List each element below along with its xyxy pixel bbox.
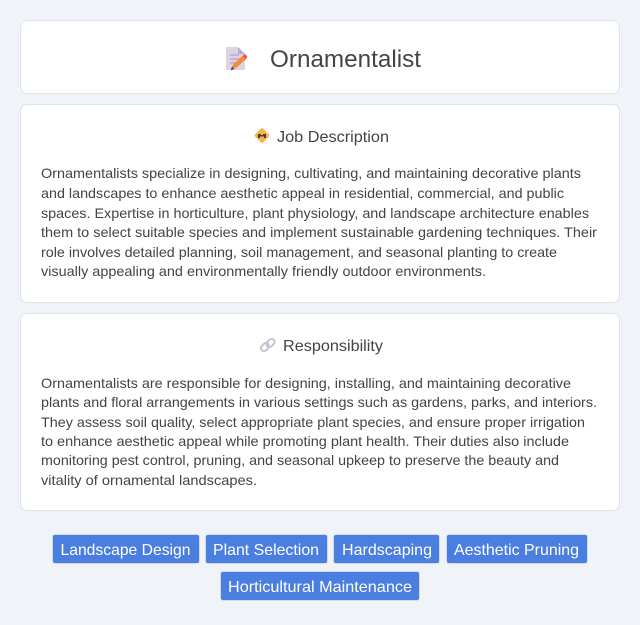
tag: Aesthetic Pruning background: [446, 534, 588, 564]
tag labels: Horticultural Maintenance: [228, 579, 412, 596]
text: responsibility body: Ornamentalists are responsible for designing, installing, and maintaining decorative: [41, 375, 571, 391]
text: responsibility body: They assess soil quality, select appropriate plant species, and ensure proper irrigation: [41, 414, 585, 430]
text: responsibility body: to enhance aesthetic appeal while promoting plant health. Their duties also include: [41, 433, 569, 449]
tag labels: [60, 542, 579, 596]
text: responsibility body: vitality of ornamental landscapes.: [41, 472, 257, 488]
text: job description body: [41, 165, 597, 279]
text: job description body: Ornamentalists specialize in designing, cultivating, and maintaining decorative plants: [41, 165, 581, 181]
title: Ornamentalist: [270, 46, 421, 73]
tag labels: Landscape Design: [60, 542, 190, 559]
icon: document with pencil: [226, 47, 248, 70]
tag: Hardscaping background: [333, 534, 440, 564]
tag labels: Plant Selection: [213, 542, 319, 559]
tag labels: Aesthetic Pruning: [454, 542, 579, 559]
heading: Responsibility: Responsibility: [283, 338, 383, 355]
text: job description body: visually appealing and environmentally friendly outdoor environments.: [41, 263, 486, 279]
text: job description body: them to select suitable species and implement sustainable gardening techniques. Their: [41, 224, 597, 240]
tag: Horticultural Maintenance background: [220, 571, 420, 601]
text: job description body: spaces. Expertise in horticulture, plant physiology, and landscape architecture enables: [41, 205, 589, 221]
text: responsibility body: [41, 375, 597, 488]
text: responsibility body: monitoring pest control, pruning, and seasonal upkeep to preserve the beauty and: [41, 452, 559, 468]
tag: Landscape Design background: [52, 534, 200, 564]
panel: responsibility: [20, 313, 620, 511]
text: responsibility body: plants and floral arrangements in various settings such as gardens, parks, and interiors.: [41, 394, 597, 410]
panel: title: [20, 20, 620, 94]
text: job description body: role involves detailed planning, soil management, and seasonal planting to create: [41, 244, 557, 260]
heading: Job Description: Job Description: [277, 129, 389, 146]
icon: job description diamond: [254, 127, 270, 144]
panel: job description: [20, 104, 620, 303]
icon: chain link: [260, 338, 276, 352]
text: job description body: and landscapes to enhance aesthetic appeal in residential, commercial, and public: [41, 185, 564, 201]
tag labels: Hardscaping: [342, 542, 432, 559]
tag: Plant Selection background: [205, 534, 328, 564]
